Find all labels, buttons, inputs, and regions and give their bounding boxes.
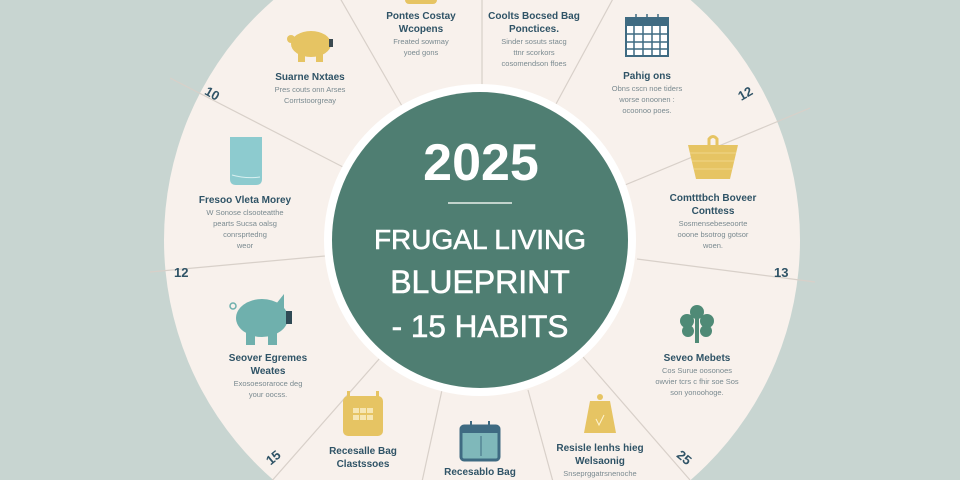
item: teal piggy: Seover Egremes	[229, 353, 307, 364]
item: leaf: owvier tcrs c fhir soe Sos	[655, 377, 739, 386]
item: cup: W Sonose clsooteatthe	[206, 208, 284, 217]
item: leaf: son yonoohoge.	[670, 388, 724, 397]
numbers: 10	[202, 83, 222, 104]
item: teal piggy: Exosoesoraroce deg	[234, 379, 302, 388]
item: basket: Conttess	[692, 206, 734, 217]
item: basket: ooone bsotrog gotsor	[678, 230, 748, 239]
item: top: yoed gons	[404, 48, 438, 57]
item: cup: weor	[237, 241, 253, 250]
subtitle: FRUGAL LIVING	[374, 224, 586, 255]
item: basket: woen.	[703, 241, 723, 250]
item: yellow bag: Resisle lenhs hieg	[556, 443, 644, 454]
icon: blue calendar	[460, 421, 500, 462]
icon: yellow piggy	[287, 31, 333, 62]
item: calendar: ocoonoo poes.	[622, 106, 672, 115]
item: top center: Ponctices.	[509, 24, 559, 35]
item: yellow bag: Snseprggatrsnenoche	[563, 469, 637, 478]
item: top: Pontes Costay	[386, 11, 456, 22]
subtitle	[374, 224, 586, 344]
item: cup: conrsprtedng	[223, 230, 267, 239]
item: yellow calendar: Recesalle Bag	[329, 446, 397, 457]
text: 12	[735, 83, 755, 104]
icon: calendar	[625, 14, 669, 57]
item: leaf	[655, 353, 739, 397]
icon: cup	[230, 137, 262, 185]
item: yellow calendar: Clastssoes	[337, 459, 389, 470]
item: cup: pearts Sucsa oalsg	[213, 219, 277, 228]
item: yellow piggy: Corrtstoorgreay	[284, 96, 336, 105]
text: 13	[774, 265, 788, 280]
subtitle: BLUEPRINT	[390, 264, 570, 300]
icon: yellow calendar	[343, 391, 383, 436]
title: 2025	[423, 134, 539, 192]
item: cup	[199, 195, 291, 250]
icon: leaf	[680, 305, 714, 343]
item: yellow piggy	[275, 72, 346, 105]
item: calendar: Pahig ons	[623, 71, 671, 82]
item: leaf: Cos Surue oosonoes	[662, 366, 732, 375]
text: 15	[263, 447, 284, 468]
item: top	[386, 11, 456, 57]
icon: yellow bag	[584, 394, 616, 433]
icon: yellow top	[405, 0, 437, 4]
item: yellow bag: Welsaonig	[575, 456, 625, 467]
item: basket: Sosmensebeseoorte	[679, 219, 747, 228]
item: yellow piggy: Suarne Nxtaes	[275, 72, 345, 83]
item: calendar	[612, 71, 682, 115]
text: 12	[174, 265, 188, 280]
item: top center	[488, 11, 580, 68]
item: top center: ttnr scorkors	[513, 48, 555, 57]
icon: basket	[688, 135, 738, 179]
item: yellow bag	[556, 443, 644, 478]
item: top center: cosomendson ffoes	[502, 59, 566, 68]
item: yellow piggy: Pres couts onn Arses	[275, 85, 345, 94]
item: top center: Sinder sosuts stacg	[501, 37, 567, 46]
item: teal piggy: your oocss.	[249, 390, 287, 399]
item: cup: Fresoo Vleta Morey	[199, 195, 291, 206]
item: blue calendar: Recesablo Bag	[444, 467, 516, 478]
item: top: Wcopens	[399, 24, 443, 35]
item: teal piggy: Weates	[251, 366, 285, 377]
item: teal piggy	[229, 353, 307, 399]
item: basket: Comtttbch Boveer	[670, 193, 756, 204]
item: top center: Coolts Bocsed Bag	[488, 11, 580, 22]
item: yellow calendar	[329, 446, 397, 470]
item: calendar: worse onoonen :	[619, 95, 675, 104]
text: 25	[674, 447, 695, 468]
item: basket	[670, 193, 756, 250]
subtitle: - 15 HABITS	[392, 308, 568, 344]
icon: teal piggy	[229, 294, 292, 345]
item: calendar: Obns cscn noe tiders	[612, 84, 682, 93]
item: leaf: Seveo Mebets	[664, 353, 730, 364]
item: top: Freated sowmay	[393, 37, 449, 46]
